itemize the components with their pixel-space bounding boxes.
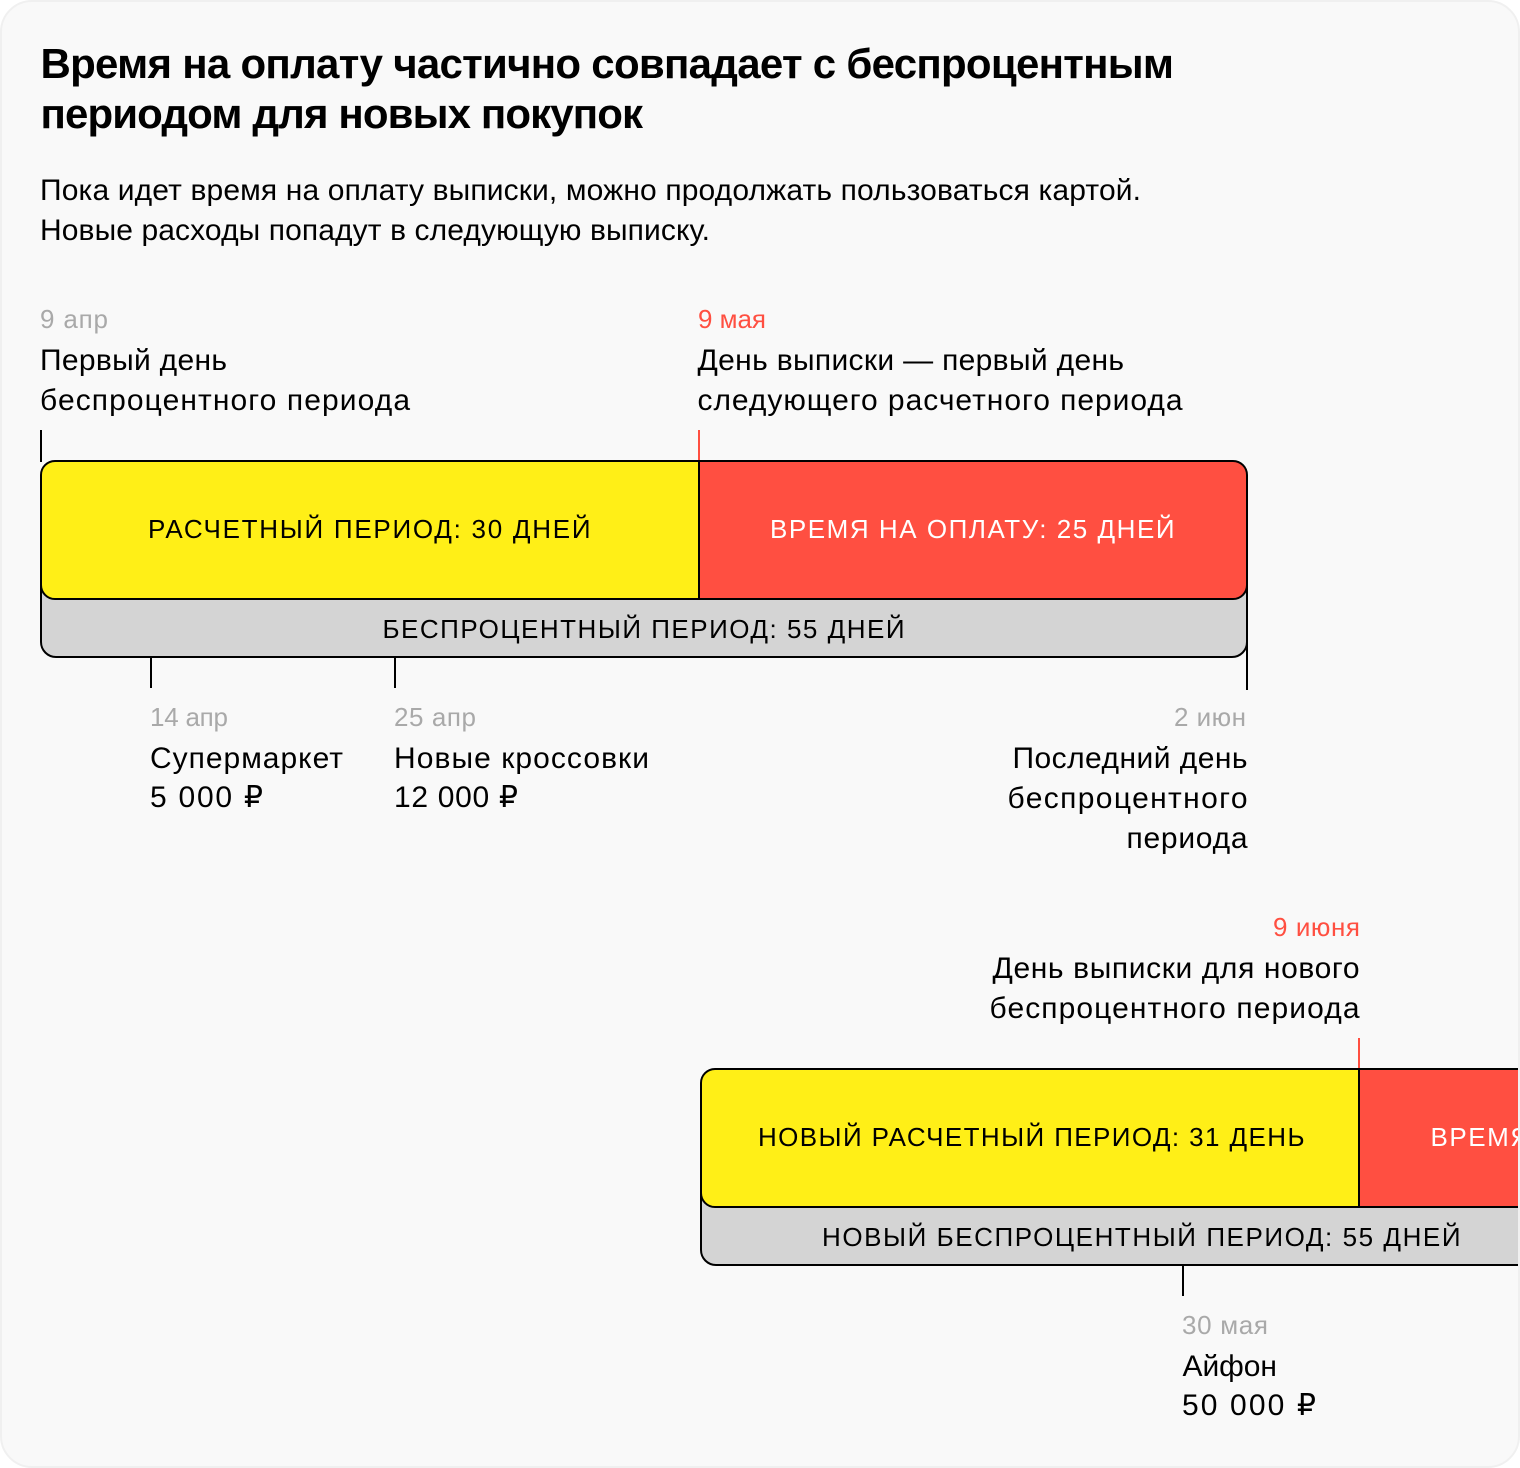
subtitle text: Пока идет время на оплату выписки, можно продолжать пользоваться картой. (40, 174, 1141, 207)
bar: interest-free period (41, 560, 1247, 657)
label: 30 мая purchase: 30 мая (1182, 1310, 1268, 1340)
label: 9 мая statement day: День выписки — первый день (698, 344, 1124, 377)
label: 30 мая purchase: Айфон (1182, 1350, 1277, 1383)
marker: end line (1246, 640, 1248, 690)
marker: start line (40, 430, 42, 462)
label: 25 апр purchase: Новые кроссовки (394, 742, 649, 775)
label: 2 июн last day: 2 июн (1174, 702, 1246, 732)
first timeline (40, 430, 1248, 690)
label: 2 июн last day: Последний день (1012, 742, 1248, 775)
label: 9 мая statement day: 9 мая (698, 304, 766, 334)
label: 25 апр purchase: 12 000 ₽ (394, 781, 518, 814)
label: 14 апр purchase: 14 апр (150, 702, 228, 732)
label: 9 июня new statement day (990, 912, 1360, 1025)
label: 9 апр first day: Первый день (40, 344, 227, 377)
bar: billing period (41, 461, 699, 599)
label: 14 апр purchase (150, 702, 343, 814)
subtitle text: Новые расходы попадут в следующую выписку. (40, 214, 710, 247)
marker: statement line (698, 430, 700, 462)
label: 14 апр purchase: Супермаркет (150, 742, 343, 775)
label: 9 июня new statement day: 9 июня (1273, 912, 1360, 942)
marker: 14 апр tick (150, 657, 152, 688)
label: 9 июня new statement day: День выписки для нового (992, 952, 1360, 985)
label: 9 апр first day: 9 апр (40, 304, 108, 334)
label: 9 апр first day: беспроцентного периода (40, 384, 410, 417)
label: 9 мая statement day: следующего расчетного периода (698, 384, 1183, 417)
second timeline (701, 1038, 1520, 1296)
title: Время на оплату частично совпадает с беспроцентным (40, 40, 1174, 87)
label: 2 июн last day: беспроцентного (1008, 782, 1248, 815)
bar: new billing period: НОВЫЙ РАСЧЕТНЫЙ ПЕРИОД: 31 ДЕНЬ (758, 1122, 1304, 1152)
label: 30 мая purchase: 50 000 ₽ (1182, 1389, 1316, 1422)
marker: 30 мая tick (1182, 1265, 1184, 1296)
label: 30 мая purchase (1182, 1310, 1316, 1422)
title: периодом для новых покупок (40, 90, 644, 137)
bar: new interest-free period: НОВЫЙ БЕСПРОЦЕНТНЫЙ ПЕРИОД: 55 ДНЕЙ (822, 1222, 1460, 1252)
label: 9 мая statement day (698, 304, 1183, 417)
label: 9 июня new statement day: беспроцентного периода (990, 992, 1360, 1025)
bar: interest-free period: БЕСПРОЦЕНТНЫЙ ПЕРИОД: 55 ДНЕЙ (382, 614, 904, 644)
marker: new statement line (1358, 1038, 1360, 1070)
bar: payment time: ВРЕМЯ НА ОПЛАТУ: 25 ДНЕЙ (770, 514, 1174, 544)
marker: 25 апр tick (394, 657, 396, 688)
bar: new billing period (701, 1069, 1359, 1207)
subtitle text (40, 174, 1141, 247)
bar: new payment time (1359, 1069, 1520, 1207)
bar: new interest-free period (700, 1193, 1518, 1266)
bar: payment time (699, 461, 1247, 599)
label: 14 апр purchase: 5 000 ₽ (150, 781, 263, 814)
label: 25 апр purchase (394, 702, 649, 814)
label: 25 апр purchase: 25 апр (394, 702, 476, 732)
label: 2 июн last day (1008, 702, 1248, 855)
bar: billing period: РАСЧЕТНЫЙ ПЕРИОД: 30 ДНЕЙ (148, 514, 590, 544)
label: 9 апр first day (40, 304, 410, 417)
title (40, 40, 1174, 137)
label: 2 июн last day: периода (1126, 822, 1248, 855)
